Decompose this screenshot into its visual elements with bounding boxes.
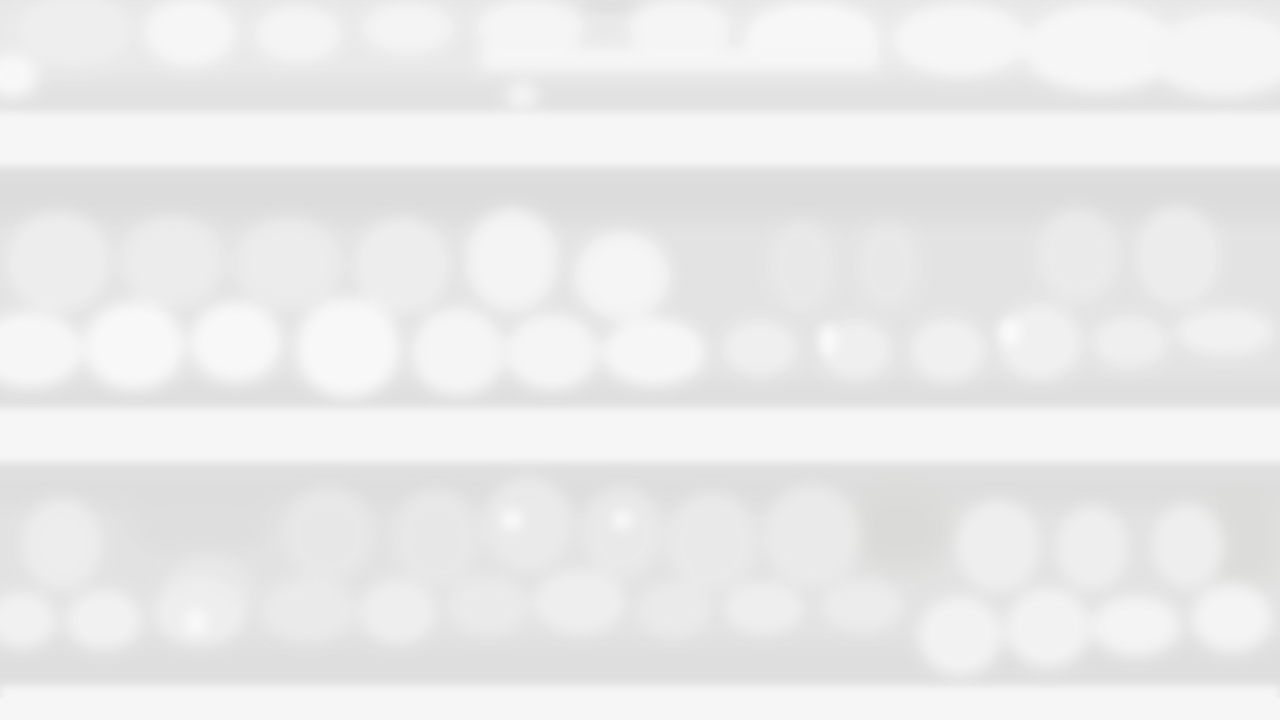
highlights on produce <box>185 319 1021 635</box>
top row of produce <box>0 0 1280 110</box>
shelf: bottom <box>0 686 1280 720</box>
bottom row of produce <box>0 476 1272 676</box>
middle row of produce <box>0 206 1275 398</box>
shelf: middle <box>0 408 1280 462</box>
shelf: top <box>0 112 1280 166</box>
